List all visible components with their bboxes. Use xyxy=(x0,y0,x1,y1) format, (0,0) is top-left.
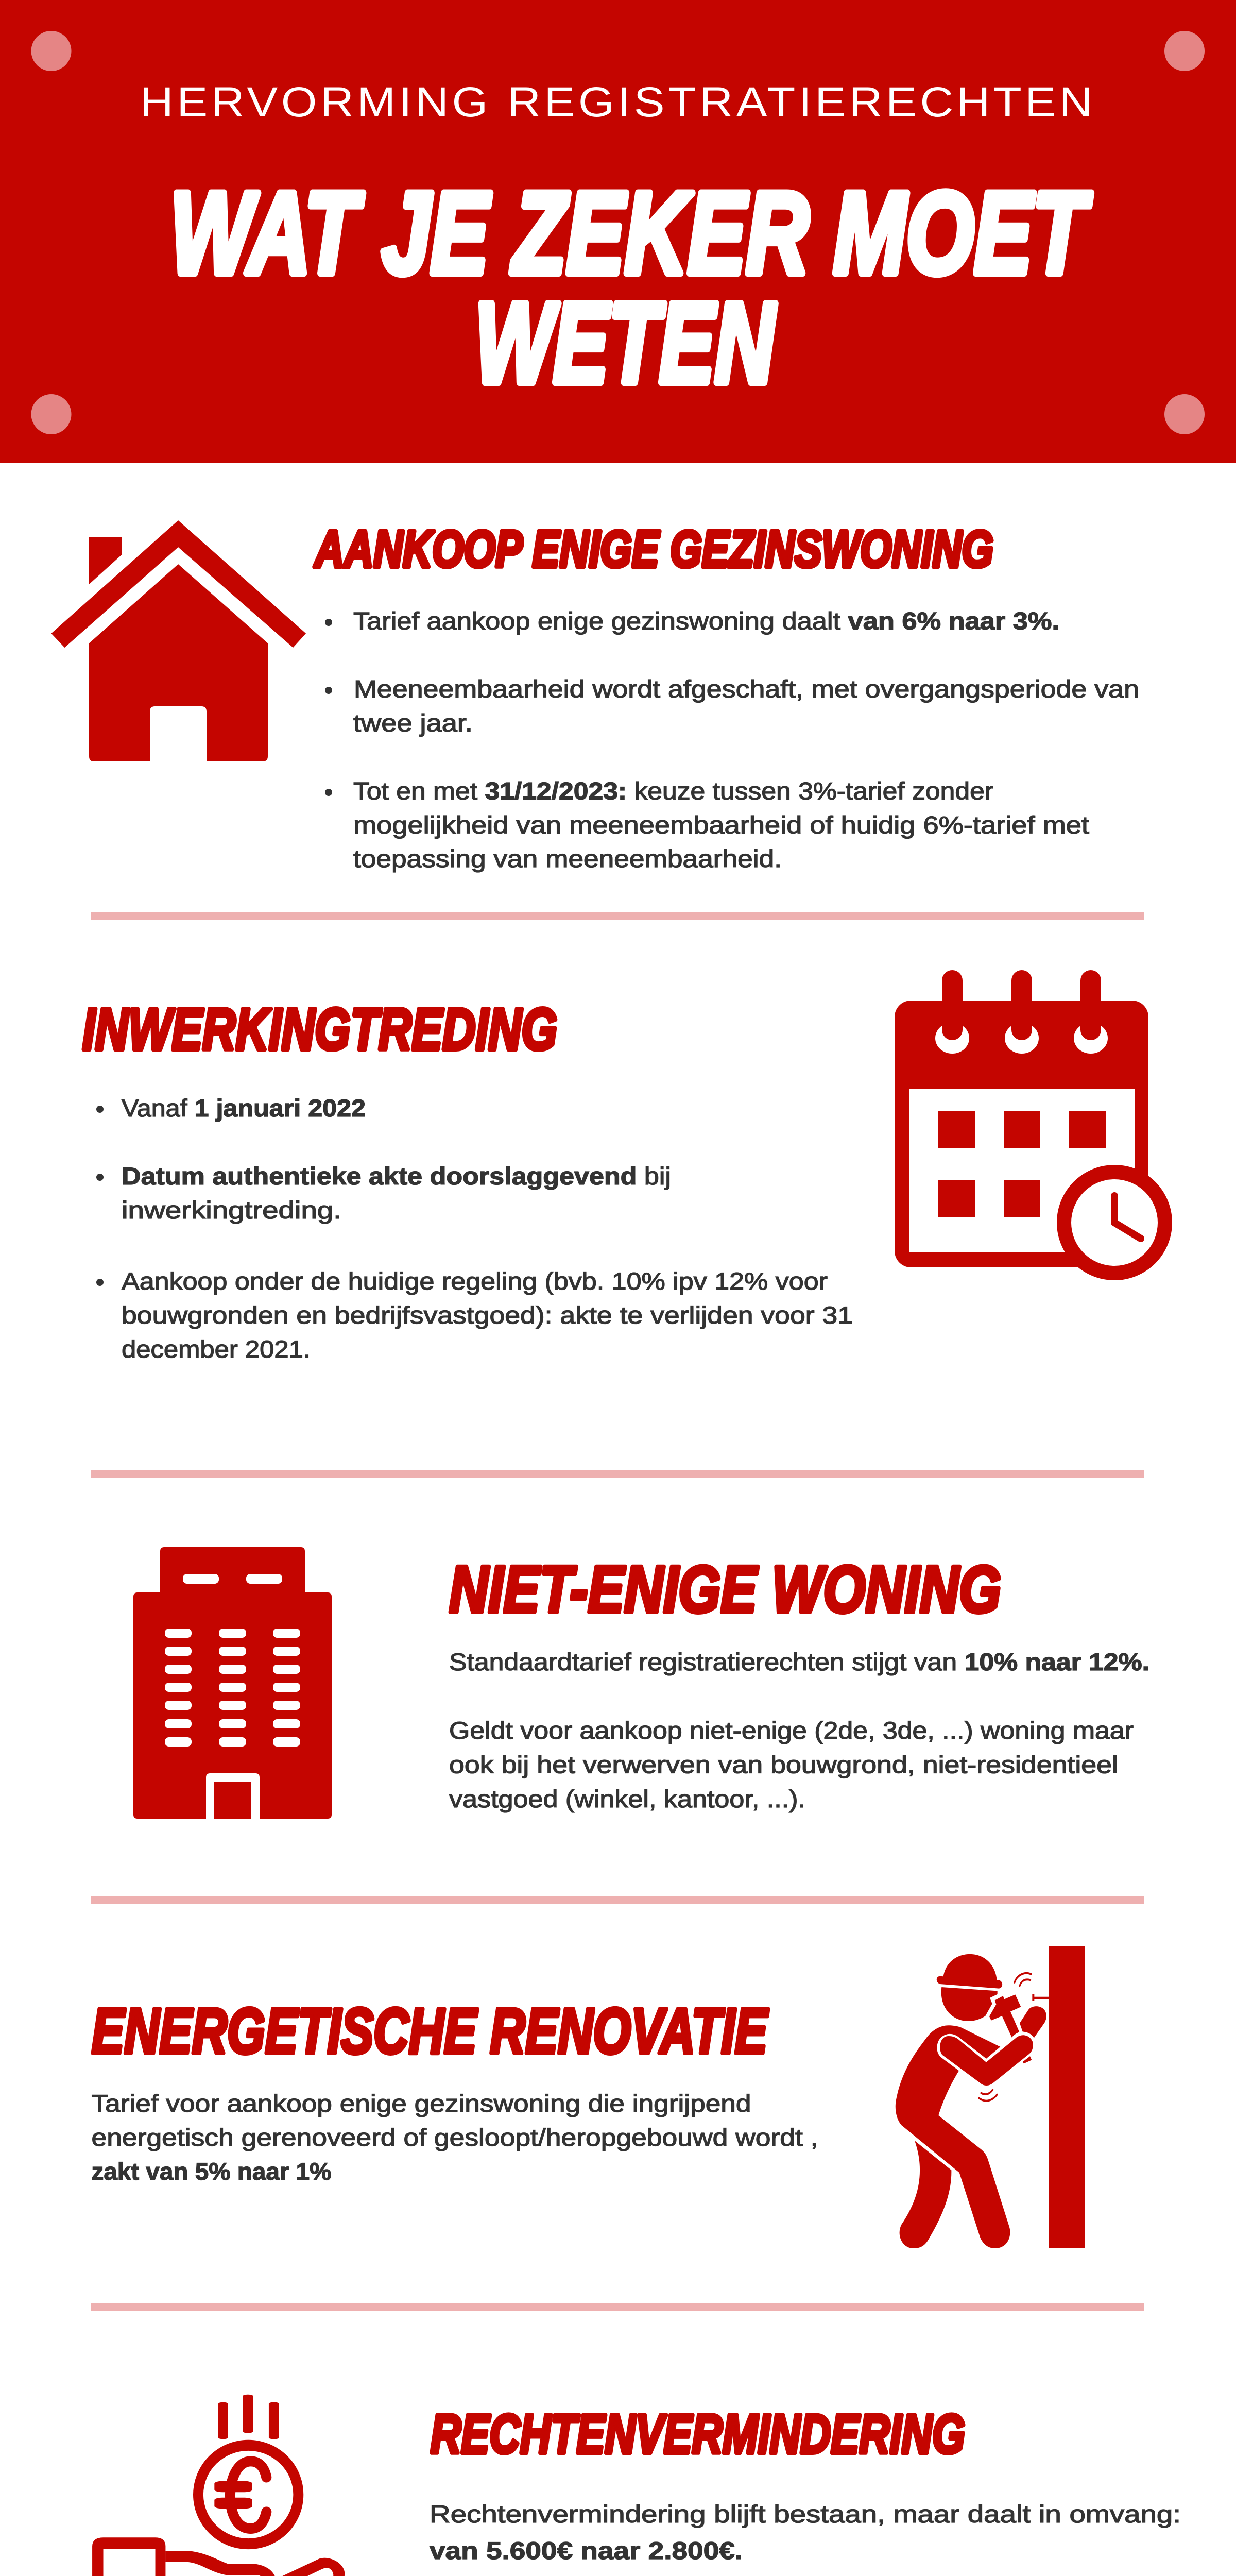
text block: zakt van 5% naar 1% xyxy=(92,2158,332,2185)
panel: inwerkingtreding xyxy=(82,970,1172,1363)
text block: Rechtenvermindering blijft bestaan, maar daalt in omvang: xyxy=(430,2500,1181,2528)
text block: van 5.600€ naar 2.800€. xyxy=(430,2537,743,2564)
heading: INWERKINGTREDING xyxy=(82,997,557,1062)
text block xyxy=(449,1648,1149,1812)
heading: NIET-ENIGE WONING xyxy=(449,1553,1001,1626)
icon: worker hammering at a wall xyxy=(896,1946,1085,2248)
bullet list: inwerkingtreding. xyxy=(122,1196,341,1224)
bullet list: december 2021. xyxy=(122,1335,311,1363)
bullet list: Meeneembaarheid wordt afgeschaft, met overgangsperiode van xyxy=(354,675,1139,703)
text block: Standaardtarief registratierechten stijgt van 10% naar 12%. xyxy=(449,1648,1149,1675)
text block xyxy=(430,2500,1181,2564)
text block: energetisch gerenoveerd of gesloopt/heropgebouwd wordt , xyxy=(92,2124,818,2151)
bullet list: Tarief aankoop enige gezinswoning daalt van 6% naar 3%. xyxy=(353,607,1059,635)
bullet list xyxy=(96,1094,853,1363)
bullet list: Tot en met 31/12/2023: keuze tussen 3%-tarief zonder xyxy=(353,777,993,805)
bullet list: Vanaf 1 januari 2022 xyxy=(122,1094,366,1122)
icon: calendar with clock xyxy=(895,970,1172,1280)
panel: aankoop enige gezinswoning xyxy=(52,520,1139,872)
icon: hand holding euro coin xyxy=(92,2395,345,2576)
header subtitle: HERVORMING REGISTRATIERECHTEN xyxy=(140,79,1096,126)
panel: header xyxy=(0,0,1236,463)
heading: AANKOOP ENIGE GEZINSWONING xyxy=(314,520,993,578)
bullet list: toepassing van meeneembaarheid. xyxy=(353,845,782,872)
bullet list: Datum authentieke akte doorslaggevend bij xyxy=(122,1162,671,1190)
bullet list: Aankoop onder de huidige regeling (bvb. 10% ipv 12% voor xyxy=(122,1267,828,1295)
heading: RECHTENVERMINDERING xyxy=(431,2403,965,2465)
bullet list: mogelijkheid van meeneembaarheid of huidig 6%-tarief met xyxy=(353,811,1089,839)
text block: ook bij het verwerven van bouwgrond, niet-residentieel xyxy=(449,1751,1118,1778)
text block xyxy=(92,2090,818,2185)
panel: rechtenvermindering xyxy=(92,2395,1181,2576)
text block: vastgoed (winkel, kantoor, ...). xyxy=(449,1785,805,1812)
icon: house xyxy=(52,520,306,761)
panel: niet-enige woning xyxy=(133,1547,1149,1819)
icon: building xyxy=(133,1547,332,1819)
bullet list: twee jaar. xyxy=(353,709,473,737)
bullet list: bouwgronden en bedrijfsvastgoed): akte te verlijden voor 31 xyxy=(122,1301,853,1329)
bullet list xyxy=(325,607,1139,872)
heading: ENERGETISCHE RENOVATIE xyxy=(92,1996,769,2067)
main title xyxy=(170,167,1092,407)
text block: Tarief voor aankoop enige gezinswoning die ingrijpend xyxy=(92,2090,751,2117)
main title: WETEN xyxy=(475,279,776,407)
panel: energetische renovatie xyxy=(92,1946,1085,2248)
text block: Geldt voor aankoop niet-enige (2de, 3de, ...) woning maar xyxy=(449,1717,1134,1744)
